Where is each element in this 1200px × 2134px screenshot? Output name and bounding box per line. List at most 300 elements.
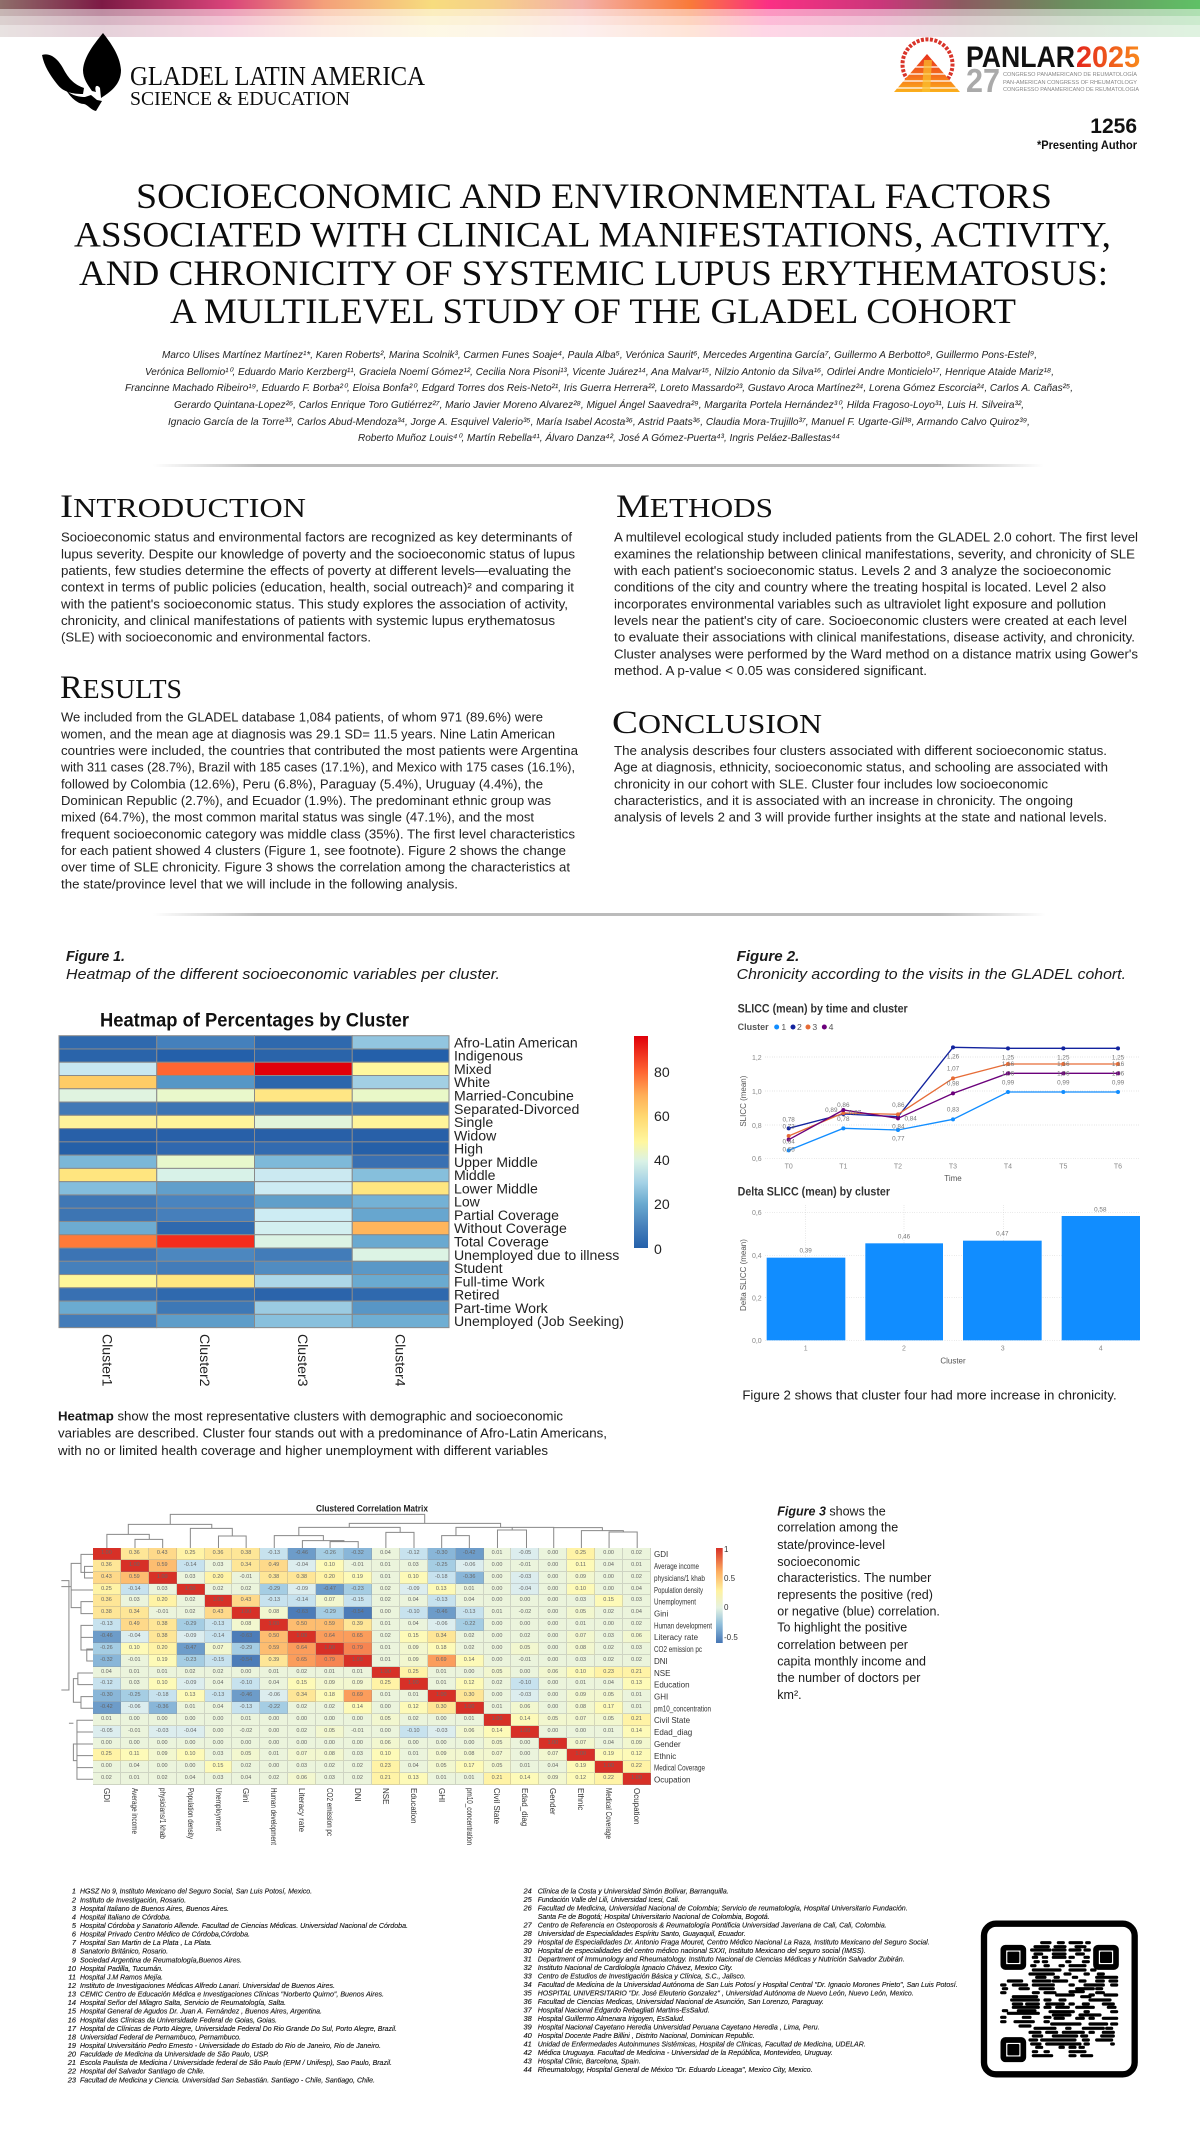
heatmap colour scale: 0 [654, 1241, 662, 1257]
line chart value labels: 0,64 [783, 1138, 795, 1145]
text block: figure 3 description: state/province-level [777, 1538, 885, 1552]
correlation heatmap cells: -0.13 [268, 1550, 280, 1556]
correlation row labels: pm10_concentration [654, 1704, 711, 1714]
correlation heatmap cells: 0.04 [213, 1704, 223, 1710]
heatmap explanatory text [57, 1408, 607, 1458]
footnotes: affiliations 1 to 23: 15 [68, 2007, 77, 2016]
correlation heatmap cells: 0.01 [631, 1704, 642, 1710]
text block: conclusion body: analysis of levels 2 and 3 will provide further insights at the state and national levels. [614, 810, 1107, 825]
correlation heatmap cells: -0.46 [240, 1692, 252, 1698]
correlation heatmap cells: 0.00 [464, 1668, 474, 1674]
correlation heatmap cells: 0.02 [241, 1586, 251, 1592]
correlation heatmap cells: -0.14 [295, 1597, 308, 1603]
correlation heatmap cells: 1.00 [631, 1775, 642, 1781]
line chart value labels: 0,78 [837, 1116, 850, 1123]
footnotes: affiliations 24 to 44: 32 [523, 1963, 532, 1972]
correlation heatmap cells: -0.29 [268, 1586, 280, 1592]
correlation heatmap cells: 0.00 [380, 1704, 391, 1710]
footnotes: affiliations 24 to 44: Hospital Nacional Cayetano Heredia Universidad Peruana Cayetano Heredia , Lima, Peru. [538, 2023, 820, 2032]
correlation heatmap cells: 0.02 [185, 1597, 196, 1603]
correlation heatmap cells: 1.00 [241, 1609, 251, 1615]
correlation heatmap cells: -0.10 [407, 1609, 420, 1615]
line chart value labels: 1,16 [1112, 1061, 1125, 1068]
correlation heatmap cells: 0.04 [380, 1550, 391, 1556]
correlation heatmap cells: 0.00 [408, 1740, 419, 1746]
correlation heatmap cells: 0.12 [575, 1775, 586, 1781]
panel: figure 3 clustered correlation matrix [61, 1504, 738, 1846]
text block: results body: countries were included, the countries that contributed the most patients were Argentina [61, 743, 579, 758]
correlation heatmap cells: 0.13 [408, 1775, 419, 1781]
text block: results body: Dominican Republic (2.7%), and Ecuador (1.9%). The predominant ethnic group was [61, 793, 551, 808]
heatmap title: Heatmap of Percentages by Cluster [100, 1010, 410, 1032]
figure 2 caption: Chronicity according to the visits in the GLADEL cohort. [737, 967, 1126, 983]
author list: Verónica Bellomio¹⁰, Eduardo Mario Kerzberg¹¹, Graciela Noemí Gómez¹², Cecilia Nora Pisoni¹³, Vicente Juárez¹⁴, Ana Malvar¹⁵, Nilzio Antonio da Silva¹⁶, Odirlei Andre Monticielo¹⁷, Henrique Ataide Mariz¹⁸, [145, 366, 1054, 378]
line chart value labels: 0,99 [1057, 1079, 1070, 1086]
chart: Delta SLICC bar chart: 1 [804, 1346, 808, 1353]
line chart value labels: 0,86 [892, 1102, 905, 1109]
footnotes: affiliations 1 to 23: 2 [71, 1895, 76, 1904]
correlation heatmap cells: 1.00 [324, 1645, 335, 1651]
figure 1 caption [66, 949, 500, 983]
correlation heatmap cells: 0.25 [380, 1680, 391, 1686]
correlation heatmap cells: 0.14 [631, 1728, 642, 1734]
correlation heatmap cells: 0.04 [408, 1621, 419, 1627]
correlation heatmap cells: 0.49 [268, 1562, 279, 1568]
correlation heatmap cells: 0.04 [464, 1597, 474, 1603]
correlation column labels: Gender [548, 1788, 557, 1815]
correlation heatmap cells: 0.21 [631, 1716, 642, 1722]
correlation heatmap cells: 0.00 [547, 1574, 558, 1580]
correlation heatmap cells: 0.06 [631, 1633, 642, 1639]
text block: results body: the state/province level that we will include in the following analysis. [61, 876, 458, 891]
correlation row labels: physicians/1 khab [654, 1574, 705, 1583]
correlation heatmap cells: 0.01 [631, 1562, 642, 1568]
heatmap row labels: Single [454, 1114, 493, 1130]
correlation heatmap cells: 0.00 [296, 1716, 307, 1722]
heatmap row labels: Part-time Work [454, 1300, 549, 1316]
footnotes: affiliations 1 to 23: 1 [72, 1887, 76, 1896]
correlation heatmap cells: 0.07 [575, 1716, 586, 1722]
heatmap row labels: Indigenous [454, 1048, 523, 1064]
correlation heatmap cells: 0.59 [268, 1645, 279, 1651]
correlation heatmap cells: 0.02 [213, 1586, 223, 1592]
heatmap row labels: Unemployed due to illness [454, 1247, 619, 1263]
correlation heatmap cells: 0.09 [157, 1751, 168, 1757]
author list: Roberto Muñoz Louis⁴⁰, Martín Rebella⁴¹, Álvaro Danza⁴², José A Gómez-Puerta⁴³, Ingris Peláez-Ballestas⁴⁴ [358, 431, 840, 444]
correlation heatmap cells: 0.00 [157, 1763, 168, 1769]
correlation heatmap cells: 0.38 [296, 1574, 307, 1580]
correlation column labels: Human development [269, 1788, 278, 1846]
correlation heatmap cells: 0.12 [464, 1680, 474, 1686]
correlation heatmap cells: 0.08 [324, 1751, 335, 1757]
correlation heatmap cells: 0.03 [213, 1562, 223, 1568]
correlation heatmap cells: 0.00 [185, 1763, 196, 1769]
footnotes: affiliations 24 to 44: Facultad de Ciencias Medicas, Universidad Nacional de Asunción, San Lorenzo, Paraguay. [538, 1997, 824, 2006]
panel: conclusion [612, 705, 1108, 825]
correlation heatmap cells: 0.00 [547, 1562, 558, 1568]
text block: methods body: method. A p-value < 0.05 was considered significant. [614, 663, 927, 678]
correlation heatmap cells: 0.43 [101, 1574, 112, 1580]
correlation heatmap cells: 0.09 [575, 1692, 586, 1698]
line chart value labels: 1,06 [1057, 1070, 1070, 1077]
panel: results [60, 670, 579, 891]
correlation heatmap cells: 0.10 [129, 1645, 140, 1651]
correlation heatmap cells: 0.03 [631, 1597, 642, 1603]
correlation heatmap cells: 1.00 [547, 1740, 558, 1746]
text block: figure 3 description: To highlight the positive [777, 1621, 907, 1635]
correlation heatmap cells: 1.00 [101, 1550, 112, 1556]
correlation heatmap cells: 0.01 [380, 1657, 391, 1663]
title [74, 176, 1111, 331]
footnotes: affiliations 24 to 44: 25 [522, 1895, 533, 1904]
line chart value labels: 0,87 [849, 1110, 862, 1117]
correlation heatmap cells: 0.05 [603, 1692, 614, 1698]
correlation heatmap cells: 0.05 [575, 1609, 586, 1615]
correlation column labels: Education [409, 1788, 418, 1824]
line chart value labels: 1,25 [1002, 1055, 1015, 1062]
heatmap row labels: Retired [454, 1287, 499, 1303]
text block: conclusion body [614, 743, 1108, 825]
line chart value labels: 1,06 [1002, 1070, 1015, 1077]
correlation heatmap cells: -0.18 [156, 1692, 169, 1698]
footnotes: affiliations 24 to 44: Hospital Docente Padre Billini , Distrito Nacional, Dominican Republic. [538, 2031, 755, 2040]
heatmap row labels: Widow [454, 1127, 497, 1143]
correlation colour scale: 0 [724, 1603, 729, 1612]
correlation heatmap cells: 0.02 [631, 1574, 642, 1580]
logo: PANLAR 2025: 27 [966, 62, 1000, 99]
chart legend: 2 [797, 1022, 802, 1032]
correlation column labels [102, 1788, 641, 1846]
logo: GLADEL Latin America [42, 33, 425, 111]
footnotes: affiliations 1 to 23: 19 [68, 2041, 76, 2050]
footnotes: affiliations 1 to 23: 20 [67, 2050, 77, 2058]
correlation heatmap cells: 0.43 [213, 1609, 223, 1615]
correlation heatmap cells: 0.00 [268, 1740, 279, 1746]
author list: Marco Ulises Martínez Martínez¹*, Karen Roberts², Marina Scolnik³, Carmen Funes Soaje⁴, Paula Alba⁵, Verónica Saurit⁶, Mercedes Argentina García⁷, Guillermo A Berbotto⁸, Guillermo Pons-Estel⁹, [162, 349, 1037, 361]
correlation row labels: Gender [654, 1740, 681, 1749]
correlation heatmap cells: 0.05 [520, 1645, 530, 1651]
text block: results body: We included from the GLADEL database 1,084 patients, of whom 971 (89.6%) were [61, 710, 543, 725]
footnotes: affiliations 24 to 44: 41 [523, 2040, 532, 2049]
correlation heatmap cells: 0.03 [213, 1775, 223, 1781]
author list [125, 349, 1073, 444]
correlation heatmap cells: 0.79 [324, 1657, 335, 1663]
correlation matrix title: Clustered Correlation Matrix [316, 1504, 429, 1515]
correlation heatmap cells: 0.59 [129, 1574, 140, 1580]
correlation heatmap cells: 0.11 [129, 1751, 139, 1757]
correlation heatmap cells: -0.29 [240, 1645, 252, 1651]
correlation heatmap cells: 0.00 [101, 1763, 112, 1769]
correlation heatmap cells: 0.00 [129, 1716, 140, 1722]
correlation heatmap cells: 0.02 [603, 1645, 614, 1651]
figure 1 caption: Heatmap of the different socioeconomic variables per cluster. [66, 966, 500, 983]
correlation heatmap cells: 0.08 [268, 1609, 279, 1615]
chart: SLICC line chart: T3 [949, 1164, 957, 1171]
correlation heatmap cells: -0.01 [519, 1657, 531, 1663]
footnotes: affiliations 24 to 44: 44 [523, 2065, 532, 2074]
correlation heatmap cells: -0.15 [212, 1657, 224, 1663]
correlation heatmap cells: 1.00 [129, 1562, 140, 1568]
correlation colour scale: 0.5 [724, 1574, 736, 1583]
chart: Delta SLICC bar chart: 2 [902, 1346, 906, 1353]
line chart value labels: 0,83 [947, 1107, 960, 1114]
footnotes: affiliations 24 to 44: 26 [522, 1903, 533, 1912]
footnotes: affiliations 1 to 23: Hospital General de Agudos Dr. Juan A. Fernández , Buenos Aires, Argentina. [80, 2007, 322, 2016]
correlation heatmap cells: 0.14 [464, 1657, 474, 1663]
correlation heatmap cells: 1.00 [520, 1728, 530, 1734]
footnotes: affiliations 1 to 23: Hospital San Martin de La Plata , La Plata. [80, 1938, 212, 1947]
footnotes: affiliations 24 to 44: Médica Uruguaya. Facultad de Medicina - Universidad de la República, Montevideo, Uruguay. [538, 2048, 833, 2057]
correlation heatmap cells: 0.05 [492, 1763, 502, 1769]
correlation heatmap cells: 0.01 [436, 1680, 447, 1686]
chart: SLICC line chart: 1,0 [752, 1089, 762, 1096]
correlation row labels: Ethnic [654, 1752, 676, 1761]
footnotes: affiliations 24 to 44: Santa Fe de Bogotá; Hospital Universitario Nacional de Colombia, Bogotá. [538, 1912, 770, 1921]
correlation heatmap cells: -0.54 [240, 1657, 252, 1663]
text block: results body: mixed (64.7%), the most common marital status was single (47.1%), and the most [61, 810, 534, 825]
logo: GLADEL Latin America: SCIENCE & EDUCATION [130, 88, 350, 110]
correlation heatmap cells: 0.03 [324, 1775, 335, 1781]
footnotes: affiliations 24 to 44: 39 [523, 2023, 532, 2032]
correlation heatmap cells: 0.00 [492, 1597, 502, 1603]
correlation heatmap cells: 0.36 [213, 1550, 223, 1556]
correlation heatmap cells: 0.36 [101, 1562, 112, 1568]
heatmap explanatory text: Heatmap show the most representative clusters with demographic and socioeconomic [58, 1408, 564, 1423]
correlation heatmap cells: 0.01 [268, 1751, 279, 1757]
text block: results body: over time of SLE chronicity. Figure 3 shows the correlation among the characteristics at [61, 860, 570, 875]
heatmap row labels: Middle [454, 1167, 496, 1183]
footnotes: affiliations 1 to 23: 16 [68, 2015, 77, 2024]
correlation heatmap cells: 0.13 [631, 1680, 642, 1686]
heatmap row labels: High [454, 1141, 483, 1157]
heatmap row labels: Mixed [454, 1061, 492, 1077]
footnotes: affiliations 24 to 44: HOSPITAL UNIVERSITARIO "Dr. José Eleuterio Gonzalez" , Universidad Autónoma de Nuevo León, Nuevo León, Mexico. [538, 1988, 914, 1998]
heatmap column labels [100, 1334, 408, 1387]
figure 2 explanatory text: Figure 2 shows that cluster four had more increase in chronicity. [742, 1387, 1117, 1402]
footnotes: affiliations 24 to 44: 28 [522, 1929, 533, 1938]
heading: methods: METHODS [616, 489, 773, 525]
chart: SLICC line chart: T0 [785, 1164, 793, 1171]
chart: Delta SLICC bar chart: Delta SLICC (mean) [739, 1239, 748, 1311]
heatmap column labels: Cluster3 [295, 1334, 311, 1387]
correlation heatmap cells: 0.03 [185, 1574, 196, 1580]
correlation column labels: Civil State [492, 1788, 501, 1825]
correlation heatmap cells: 0.00 [436, 1716, 447, 1722]
chart: Delta SLICC bar chart: 0,2 [752, 1295, 762, 1302]
correlation heatmap cells [93, 1548, 651, 1785]
correlation heatmap cells: 0.10 [185, 1751, 196, 1757]
correlation heatmap cells: 0.07 [324, 1597, 335, 1603]
correlation heatmap cells: 0.02 [157, 1775, 168, 1781]
correlation row labels: Average income [654, 1562, 699, 1571]
correlation heatmap cells: -0.22 [463, 1621, 475, 1627]
correlation heatmap cells: 0.06 [520, 1704, 530, 1710]
correlation heatmap cells: 0.04 [268, 1680, 279, 1686]
correlation column labels: DNI [353, 1788, 362, 1802]
correlation heatmap cells: 0.03 [129, 1680, 140, 1686]
correlation heatmap cells: 1.00 [436, 1692, 447, 1698]
text block: figure 3 description: correlation among the [777, 1521, 898, 1535]
footnotes: affiliations 24 to 44: Centro de Referencia en Osteoporosis & Reumatología Pontificia Universidad Javeriana de Cali, Cali, Colombia. [538, 1920, 887, 1929]
correlation heatmap cells: 0.38 [268, 1574, 279, 1580]
correlation heatmap cells: -0.10 [240, 1680, 252, 1686]
correlation heatmap cells: 0.02 [213, 1668, 223, 1674]
text block: introduction body: (SLE) with socioeconomic and environmental factors. [61, 630, 371, 645]
correlation row labels: Unemployment [654, 1598, 697, 1606]
line chart value labels: 0,78 [783, 1116, 795, 1123]
correlation heatmap cells: 0.02 [352, 1763, 363, 1769]
correlation heatmap cells: 0.38 [241, 1550, 251, 1556]
footnotes: affiliations 1 to 23: 18 [68, 2032, 77, 2041]
correlation heatmap cells: -0.05 [519, 1550, 531, 1556]
correlation heatmap cells: -0.02 [519, 1609, 531, 1615]
icon: butterfly [42, 33, 121, 111]
text block: results body: women, and the mean age at diagnosis was 29.1 SD= 11.5 years. Nine Latin American [60, 726, 555, 741]
correlation heatmap cells: -0.01 [351, 1562, 364, 1568]
correlation heatmap cells: 0.08 [575, 1704, 586, 1710]
footnotes: affiliations 24 to 44: Instituto Nacional de Cardiología Ignacio Chávez, Mexico City. [538, 1963, 733, 1972]
correlation heatmap cells: 1.00 [603, 1763, 614, 1769]
correlation heatmap cells: 0.02 [520, 1633, 530, 1639]
correlation heatmap cells: 0.01 [436, 1775, 447, 1781]
correlation heatmap cells: -0.26 [100, 1645, 113, 1651]
correlation heatmap cells: 0.34 [296, 1692, 307, 1698]
correlation heatmap cells: -0.06 [128, 1704, 141, 1710]
correlation heatmap cells: -0.14 [128, 1586, 141, 1592]
correlation heatmap cells: -0.36 [156, 1704, 169, 1710]
line chart value labels: 1,06 [1112, 1070, 1125, 1077]
correlation heatmap cells: -0.63 [240, 1633, 252, 1639]
heatmap row labels: Partial Coverage [454, 1207, 559, 1223]
correlation heatmap cells: 0.43 [157, 1550, 168, 1556]
heatmap cells [59, 1036, 449, 1328]
correlation heatmap cells: 0.04 [603, 1562, 614, 1568]
footnotes: affiliations 24 to 44: Hospital de Especialidades Dr. Antonio Fraga Mouret, Centro Médico Nacional La Raza, Instituto Mexicano del Seguro Social. [538, 1937, 930, 1946]
correlation heatmap cells: 0.02 [296, 1728, 307, 1734]
author list: Gerardo Quintana-Lopez²⁶, Carlos Enrique Toro Gutiérrez²⁷, Mario Javier Moreno Alvarez²⁸, Miguel Ángel Saavedra²⁹, Margarita Portela Hernández³⁰, Hilda Fragoso-Loyo³¹, Luis H. Silveira³², [174, 398, 1024, 411]
panel: figure 2 [737, 949, 1141, 1402]
line chart value labels: 0,89 [825, 1107, 838, 1114]
footnotes: affiliations 24 to 44: 34 [523, 1980, 532, 1989]
correlation heatmap cells: 0.00 [101, 1740, 112, 1746]
correlation heatmap cells: 0.03 [408, 1562, 419, 1568]
top decorative colour band [0, 0, 1200, 37]
correlation heatmap cells: 0.00 [547, 1657, 558, 1663]
text block: methods body: Cluster analyses were performed by the Ward method on a distance matrix using Gower's [614, 646, 1139, 661]
footnotes: affiliations 1 to 23: Hospital Italiano de Córdoba. [80, 1912, 171, 1921]
title: A MULTILEVEL STUDY OF THE GLADEL COHORT [170, 291, 1016, 331]
correlation heatmap cells: 0.13 [436, 1586, 447, 1592]
correlation heatmap cells: 0.49 [129, 1621, 140, 1627]
correlation heatmap cells: -0.04 [519, 1586, 531, 1592]
correlation heatmap cells: 0.06 [296, 1775, 307, 1781]
heatmap row labels: Lower Middle [454, 1180, 538, 1196]
correlation heatmap cells: 0.03 [296, 1763, 307, 1769]
correlation heatmap cells: 0.03 [575, 1597, 586, 1603]
chart: SLICC line chart [738, 1003, 1141, 1183]
footnotes: affiliations 1 to 23: Hospital Universitário Pedro Ernesto - Universidade do Estado do Rio de Janeiro, Rio de Janeiro. [80, 2041, 381, 2050]
text block: methods body: examines the relationship between clinical manifestations, severity, and chronicity of SLE [614, 546, 1135, 561]
footnotes: affiliations 24 to 44: 33 [523, 1972, 533, 1980]
left dendrogram [61, 1554, 93, 1779]
correlation heatmap cells: -0.03 [519, 1574, 531, 1580]
footnotes: affiliations 24 to 44: Clínica de la Costa y Universidad Simón Bolívar, Barranquilla. [538, 1886, 729, 1895]
footnotes: affiliations 1 to 23: 14 [68, 1998, 76, 2007]
correlation heatmap cells: 0.02 [464, 1645, 474, 1651]
line chart value labels [783, 1054, 1125, 1153]
correlation heatmap cells: 0.07 [213, 1645, 223, 1651]
correlation heatmap cells: 0.01 [157, 1668, 168, 1674]
text block: methods body: conditions of the city and country where the treating hospital is located. Level 2 also [614, 580, 1106, 595]
correlation heatmap cells: 0.10 [575, 1668, 586, 1674]
correlation heatmap cells: 0.22 [603, 1775, 614, 1781]
correlation heatmap cells: 0.02 [380, 1586, 391, 1592]
correlation heatmap cells: 0.00 [547, 1728, 558, 1734]
heatmap explanatory text: variables are described. Cluster four stands out with a predominance of Afro-Latin Americans, [58, 1426, 607, 1441]
figure 1 caption: Figure 1. [66, 949, 125, 965]
correlation heatmap cells: 0.03 [129, 1597, 140, 1603]
text block: methods body: incorporates environmental variables such as ultraviolet light exposure and pollution [614, 596, 1106, 611]
correlation heatmap cells: 0.00 [380, 1609, 391, 1615]
footnotes: affiliations 1 to 23: Facultad de Medicina y Ciencia. Universidad San Sebastián. Santiago - Chile, Santiago, Chile. [80, 2075, 375, 2084]
correlation heatmap cells: 1.00 [185, 1586, 196, 1592]
correlation heatmap cells: 0.00 [603, 1574, 614, 1580]
correlation column labels: Literacy rate [297, 1788, 306, 1833]
correlation heatmap cells: 0.08 [464, 1751, 474, 1757]
line chart value labels: 1,16 [1057, 1061, 1070, 1068]
heatmap row labels [454, 1034, 624, 1329]
correlation heatmap cells: -0.13 [435, 1597, 448, 1603]
correlation heatmap cells: -0.04 [184, 1728, 196, 1734]
correlation heatmap cells: 0.01 [352, 1668, 363, 1674]
footnotes: affiliations 1 to 23: 22 [67, 2067, 76, 2076]
correlation heatmap cells: 0.07 [547, 1751, 558, 1757]
correlation heatmap cells: 0.01 [101, 1716, 112, 1722]
series: cluster 4 [787, 1071, 1120, 1142]
correlation heatmap cells: -0.03 [435, 1728, 448, 1734]
chart: SLICC line chart: T4 [1004, 1164, 1012, 1171]
heatmap column labels: Cluster4 [392, 1334, 408, 1387]
correlation heatmap cells: 0.00 [157, 1716, 168, 1722]
text block: methods body: levels near the patient's city of care. Socioeconomic clusters were created at each level [614, 613, 1127, 628]
correlation heatmap cells: 0.11 [576, 1562, 586, 1568]
correlation heatmap cells: -0.06 [463, 1562, 475, 1568]
correlation heatmap cells: 0.01 [492, 1704, 502, 1710]
line chart value labels: 0,84 [892, 1124, 905, 1131]
footnotes: affiliations 1 to 23: Hospital Italiano de Buenos Aires, Buenos Aires. [80, 1904, 229, 1913]
correlation heatmap cells: 0.19 [352, 1574, 363, 1580]
correlation heatmap cells: 0.18 [436, 1645, 447, 1651]
text block: figure 3 description [777, 1505, 940, 1702]
correlation heatmap cells: -0.04 [295, 1562, 308, 1568]
chart: Delta SLICC bar chart: 0,0 [752, 1338, 762, 1345]
footnotes: affiliations 1 to 23: 23 [67, 2075, 77, 2084]
correlation heatmap cells: -0.05 [100, 1728, 113, 1734]
correlation heatmap cells: 0.01 [464, 1775, 474, 1781]
correlation row labels: Population density [654, 1586, 703, 1595]
text block: results body: with 311 cases (28.7%), Brazil with 185 cases (17.1%), and Mexico with 175 cases (16.1%), [60, 760, 575, 775]
correlation heatmap cells: 0.00 [296, 1740, 307, 1746]
line chart value labels: 0,99 [1112, 1079, 1125, 1086]
panel: figure 1 [57, 949, 670, 1458]
footnotes: affiliations 1 to 23: Hospital Privado Centro Médico de Córdoba,Córdoba. [80, 1930, 250, 1939]
correlation heatmap cells: 0.09 [408, 1645, 419, 1651]
text block: results body: followed by Colombia (12.6%), Peru (6.8%), Paraguay (5.4%), Uruguay (4.4%), the [61, 776, 543, 791]
footnotes: affiliations 24 to 44: Hospital Nacional Edgardo Rebagliati Martins-EsSalud. [538, 2006, 710, 2014]
correlation heatmap cells: -0.13 [268, 1597, 280, 1603]
footnotes: affiliations 24 to 44: 43 [523, 2057, 533, 2066]
correlation heatmap cells: 0.14 [352, 1704, 363, 1710]
